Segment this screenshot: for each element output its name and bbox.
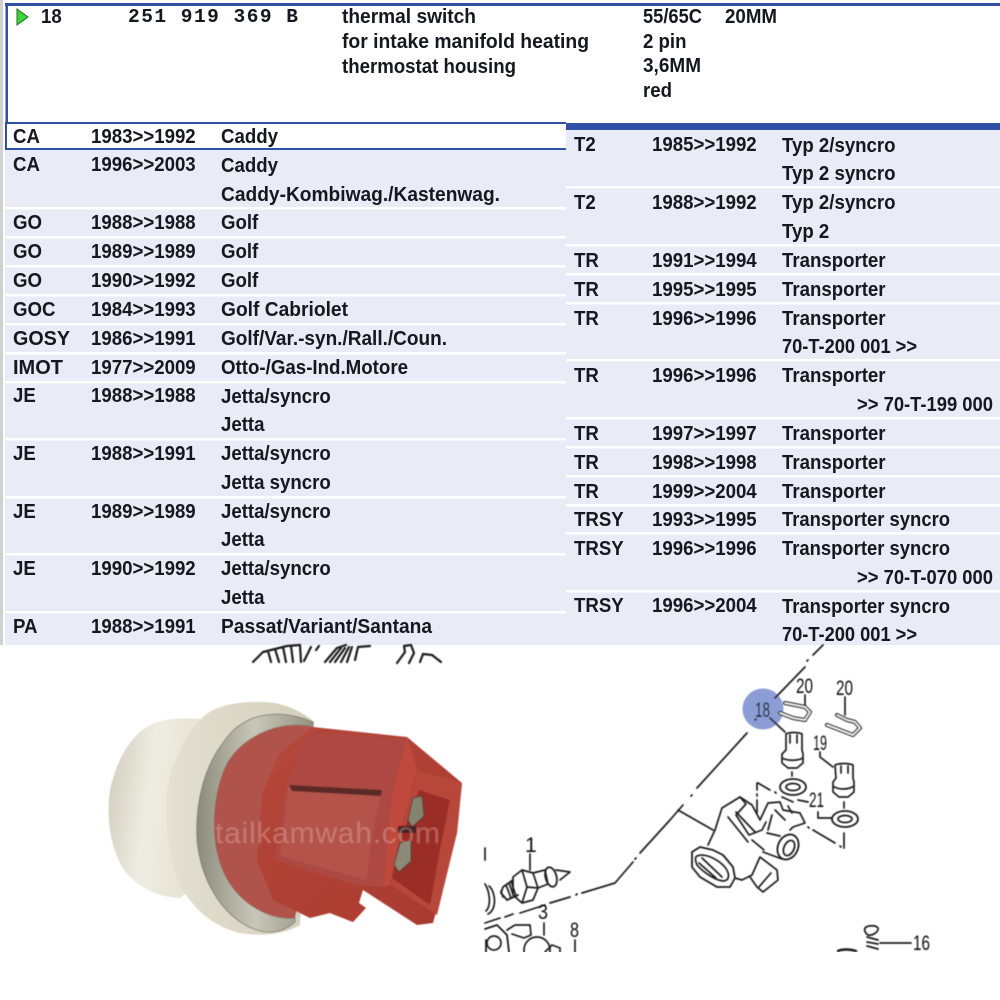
panel: left vehicle table [0, 122, 566, 645]
right table text: 70-T-200 001 >> [782, 623, 917, 646]
left table text: GOSY [13, 327, 70, 350]
left table text: JE [13, 384, 36, 407]
right table text: T2 [574, 191, 596, 214]
right table text: TR [574, 422, 599, 445]
right table text: Transporter [782, 307, 886, 330]
screw: part 16 [838, 926, 911, 951]
part labels: 1 [525, 834, 537, 857]
sensor: part 1 [485, 848, 570, 914]
left table text: 1989>>1989 [91, 500, 196, 523]
right table text [574, 133, 993, 646]
right table text: Typ 2 syncro [782, 162, 896, 185]
leader dash-dot line [485, 645, 823, 923]
metal terminals [408, 796, 424, 827]
left table text: JE [13, 442, 36, 465]
left table text: 1990>>1992 [91, 557, 196, 580]
part specifications: 55/65C [643, 5, 702, 28]
connector socket [391, 770, 462, 915]
left table text: 1988>>1988 [91, 384, 196, 407]
inner red base [214, 725, 320, 918]
right table text: 1985>>1992 [652, 133, 757, 156]
right table text: 1988>>1992 [652, 191, 757, 214]
left table text: JE [13, 500, 36, 523]
left table text: CA [13, 153, 40, 176]
thermal switch: part 19 [818, 752, 858, 827]
left table text: Jetta [221, 528, 266, 551]
connector [257, 727, 462, 925]
right table text: 1999>>2004 [652, 480, 757, 503]
right table text: 1997>>1997 [652, 422, 757, 445]
right table text: Transporter [782, 480, 886, 503]
watermark: tailkamwah.com [215, 817, 440, 850]
left table text: CA [13, 125, 40, 148]
right table text: 1991>>1994 [652, 249, 757, 272]
part description: thermal switch [342, 5, 476, 28]
right table text: 1998>>1998 [652, 451, 757, 474]
panel: right vehicle table [566, 123, 1000, 646]
sensor body [109, 718, 230, 898]
right table text: Transporter syncro [782, 595, 950, 618]
left table text: Jetta/syncro [221, 442, 331, 465]
right table text: Transporter [782, 422, 886, 445]
left table text: 1988>>1991 [91, 442, 196, 465]
panel: exploded parts diagram [485, 645, 930, 963]
right table text: Typ 2/syncro [782, 134, 896, 157]
right table text: 1995>>1995 [652, 278, 757, 301]
left table text: Golf [221, 211, 259, 234]
part specifications [643, 5, 777, 102]
left table text: 1990>>1992 [91, 269, 196, 292]
left table text: 1986>>1991 [91, 327, 196, 350]
right table text: TR [574, 480, 599, 503]
thermostat housing [692, 797, 805, 892]
left table text: GOC [13, 298, 55, 321]
right table text: TR [574, 451, 599, 474]
right table text: Transporter [782, 278, 886, 301]
part specifications: red [643, 79, 672, 102]
left table text: Jetta/syncro [221, 385, 331, 408]
flange [166, 702, 314, 935]
part labels: 16 [913, 932, 930, 955]
right table text: T2 [574, 133, 596, 156]
right table text: Transporter syncro [782, 537, 950, 560]
left table text [13, 125, 500, 638]
right table text: Transporter [782, 364, 886, 387]
panel: part header [0, 0, 1000, 123]
right table text: Transporter [782, 249, 886, 272]
part labels [525, 675, 930, 955]
part labels: 18 [755, 699, 770, 722]
left table text: GO [13, 240, 42, 263]
right table text: 70-T-200 001 >> [782, 335, 917, 358]
part labels: 21 [809, 789, 824, 812]
part specifications: 2 pin [643, 30, 686, 53]
right table text: Transporter syncro [782, 508, 950, 531]
left table text: Otto-/Gas-Ind.Motore [221, 356, 408, 379]
left table text: Jetta/syncro [221, 500, 331, 523]
part position number: 18 [41, 5, 62, 28]
left table text: 1984>>1993 [91, 298, 196, 321]
left table text: Golf Cabriolet [221, 298, 348, 321]
left table text: Jetta/syncro [221, 557, 331, 580]
right table text: 1996>>1996 [652, 537, 757, 560]
left table text: PA [13, 615, 38, 638]
left table text: GO [13, 211, 42, 234]
metal ring [197, 714, 313, 932]
photo: red thermal switch [109, 702, 462, 935]
right table text: TR [574, 249, 599, 272]
right table text: 1996>>1996 [652, 307, 757, 330]
diagram fragment below the left table [253, 645, 441, 663]
thermal switch: part 18 [770, 718, 806, 795]
left table text: Golf/Var.-syn./Rall./Coun. [221, 327, 447, 350]
part number: 251 919 369 B [128, 6, 298, 28]
clips: part 20 [780, 695, 860, 735]
right table text: Typ 2 [782, 220, 829, 243]
right table text: TRSY [574, 508, 624, 531]
left table text: Caddy [221, 154, 278, 177]
part labels: 8 [570, 919, 579, 942]
icon: green arrow [17, 9, 28, 25]
right table text: Transporter [782, 451, 886, 474]
right table text: 1996>>1996 [652, 364, 757, 387]
right table text: 1996>>2004 [652, 594, 757, 617]
left table text: JE [13, 557, 36, 580]
left table text: 1996>>2003 [91, 153, 196, 176]
left table text: Golf [221, 269, 259, 292]
part specifications: 20MM [725, 5, 777, 28]
left table text: Passat/Variant/Santana [221, 615, 433, 638]
callout circle: part 18 [742, 688, 784, 730]
part description: for intake manifold heating [342, 30, 589, 53]
left table text: GO [13, 269, 42, 292]
right table text: TR [574, 278, 599, 301]
right table text: TRSY [574, 594, 624, 617]
part specifications: 3,6MM [643, 54, 701, 77]
left table text: Jetta [221, 413, 266, 436]
left table text: 1988>>1988 [91, 211, 196, 234]
left table text: 1989>>1989 [91, 240, 196, 263]
part labels: 20 [836, 677, 853, 700]
part labels: 20 [796, 675, 813, 698]
left table text: IMOT [13, 356, 63, 379]
left table text: 1977>>2009 [91, 356, 196, 379]
left table text: Caddy [221, 125, 278, 148]
dashed guide lines [757, 783, 844, 848]
left table text: Jetta [221, 586, 266, 609]
part labels: 3 [538, 901, 548, 924]
left table text: 1988>>1991 [91, 615, 196, 638]
left table text: Caddy-Kombiwag./Kastenwag. [221, 183, 500, 206]
part description: thermostat housing [342, 55, 516, 78]
right table text: Typ 2/syncro [782, 191, 896, 214]
right table text: 1993>>1995 [652, 508, 757, 531]
lower left fragments: part 3 and 8 [483, 922, 577, 952]
left table text: Golf [221, 240, 259, 263]
connector top block [275, 733, 406, 887]
part description [342, 5, 589, 78]
part labels: 19 [813, 732, 827, 755]
left table text: 1983>>1992 [91, 125, 196, 148]
right table text: TRSY [574, 537, 624, 560]
leader branch [678, 810, 713, 830]
left table text: Jetta syncro [221, 471, 331, 494]
right table text: TR [574, 364, 599, 387]
right table text: TR [574, 307, 599, 330]
lower clip [330, 895, 366, 922]
